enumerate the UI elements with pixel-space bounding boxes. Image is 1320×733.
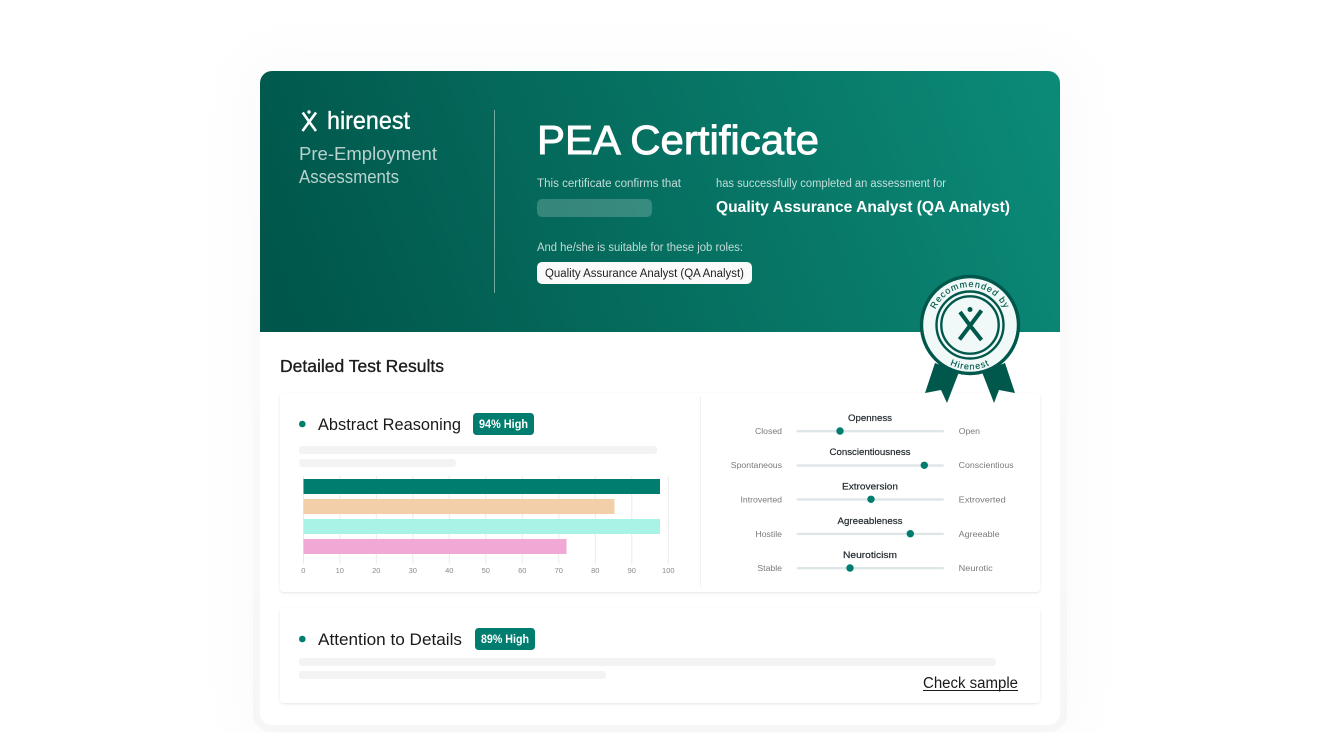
slider: openness bbox=[755, 413, 980, 436]
panel: attention to details card bbox=[280, 608, 1040, 703]
redacted name bbox=[537, 199, 652, 217]
slider: extroversion: Introverted bbox=[740, 494, 782, 504]
bar chart bbox=[301, 476, 675, 575]
x axis labels: 90 bbox=[628, 566, 636, 575]
x axis labels: 10 bbox=[336, 566, 344, 575]
x axis labels: 30 bbox=[409, 566, 417, 575]
subtitle: Pre-Employment bbox=[299, 143, 437, 164]
job role chip bbox=[537, 262, 752, 284]
badge: recommended by hirenest: Hirenest bbox=[950, 359, 990, 370]
slider: openness: Open bbox=[959, 426, 980, 436]
slider: conscientiousness: Conscientious bbox=[959, 460, 1014, 470]
seal bbox=[922, 276, 1018, 374]
slider: extroversion bbox=[740, 482, 1006, 504]
slider: neuroticism: Stable bbox=[757, 563, 782, 573]
slider: agreeableness: Agreeableness bbox=[838, 516, 903, 527]
x axis labels: 60 bbox=[518, 566, 526, 575]
icon: hirenest figure bbox=[302, 110, 316, 131]
x axis labels: 50 bbox=[482, 566, 490, 575]
card heading: Abstract Reasoning bbox=[318, 415, 461, 434]
score badge: 89% High bbox=[481, 634, 529, 646]
outer frame bbox=[253, 64, 1067, 732]
description placeholder bbox=[299, 446, 657, 467]
score badge bbox=[473, 413, 534, 435]
icon: seal figure bbox=[960, 307, 982, 340]
slider: conscientiousness: Conscientiousness bbox=[830, 447, 911, 458]
title: PEA Certificate bbox=[537, 117, 819, 163]
slider: extroversion: Extroverted bbox=[959, 494, 1006, 504]
slider: extroversion: Extroversion bbox=[842, 482, 898, 492]
card heading: Attention to Details bbox=[318, 630, 462, 649]
panel: abstract reasoning card bbox=[280, 393, 1040, 592]
slider: agreeableness: Agreeable bbox=[959, 529, 1000, 539]
x axis labels: 40 bbox=[445, 566, 453, 575]
logo: hirenest: hirenest bbox=[327, 107, 410, 135]
subtitle: Assessments bbox=[299, 166, 399, 187]
score badge bbox=[475, 628, 535, 650]
slider: openness: Closed bbox=[755, 426, 782, 436]
slider: neuroticism: Neurotic bbox=[959, 563, 993, 573]
text: assessment intro: has successfully completed an assessment for bbox=[716, 178, 946, 190]
bars bbox=[304, 479, 660, 554]
personality sliders bbox=[731, 413, 1014, 573]
x axis labels: 80 bbox=[591, 566, 599, 575]
slider: agreeableness: Hostile bbox=[755, 529, 782, 539]
x axis labels: 100 bbox=[662, 566, 675, 575]
slider: openness: Openness bbox=[848, 413, 892, 424]
job role chip: Quality Assurance Analyst (QA Analyst) bbox=[545, 268, 744, 280]
subtitle bbox=[299, 143, 437, 187]
text: assessment name: Quality Assurance Analyst (QA Analyst) bbox=[716, 199, 1010, 216]
section heading: Detailed Test Results bbox=[280, 356, 444, 376]
certificate sheet bbox=[260, 71, 1060, 725]
ribbon tails bbox=[925, 363, 1015, 403]
slider: neuroticism bbox=[757, 550, 993, 573]
description placeholder bbox=[299, 658, 996, 679]
link: check sample: Check sample bbox=[923, 675, 1018, 692]
text: suitable roles: And he/she is suitable for these job roles: bbox=[537, 242, 743, 254]
x axis labels bbox=[301, 566, 675, 575]
x axis labels: 70 bbox=[555, 566, 563, 575]
x axis labels: 0 bbox=[301, 566, 305, 575]
score badge: 94% High bbox=[479, 419, 528, 431]
slider: agreeableness bbox=[755, 516, 1000, 539]
seal text: Recommended by bbox=[930, 282, 1008, 309]
panel: certificate header bbox=[260, 71, 1060, 332]
badge: recommended by hirenest bbox=[920, 274, 1020, 403]
slider: conscientiousness: Spontaneous bbox=[731, 460, 783, 470]
text: certificate confirms: This certificate confirms that bbox=[537, 178, 682, 190]
slider: conscientiousness bbox=[731, 447, 1014, 470]
x axis labels: 20 bbox=[372, 566, 380, 575]
slider: neuroticism: Neuroticism bbox=[843, 550, 897, 561]
soft background glow bbox=[240, 55, 1080, 733]
